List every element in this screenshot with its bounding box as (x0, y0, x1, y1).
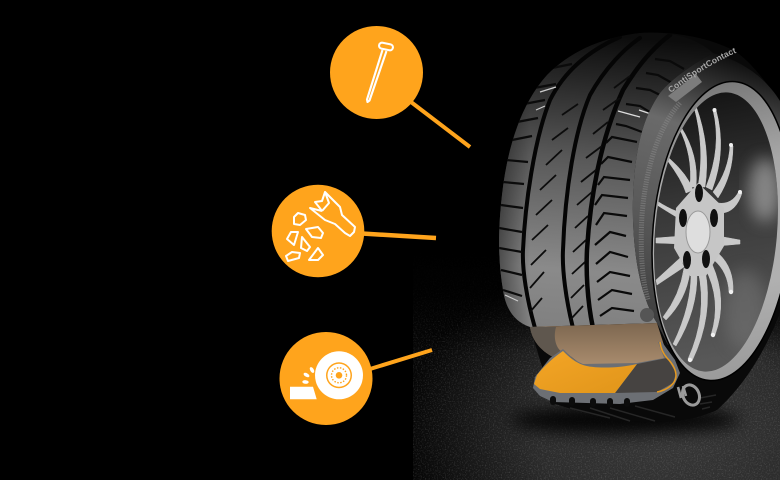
left shoulder sipes (499, 64, 572, 296)
wheel barrel (643, 87, 780, 377)
kerb (290, 387, 317, 399)
icon: broken glass (272, 185, 364, 277)
pointer line: nail (411, 102, 470, 147)
sidewall round mark (640, 308, 654, 322)
sidewall (633, 53, 780, 345)
sidewall text: ContiSportContact (668, 48, 736, 92)
orange sealant edge (657, 342, 676, 392)
tyre photo (499, 32, 780, 422)
wheel spokes (656, 106, 742, 361)
sidewall small print (641, 103, 680, 300)
tread below cross-section (570, 395, 716, 421)
wheel rim flange (640, 76, 780, 386)
icon: nail (330, 26, 423, 119)
cross-section of tyre (533, 342, 680, 407)
tread lugs (550, 396, 630, 407)
outer casing (533, 342, 680, 404)
interior left shade (530, 327, 562, 357)
spoke tips (688, 108, 742, 362)
logo on sidewall (678, 382, 703, 408)
tread surface (499, 44, 712, 327)
middle rib sipes (530, 76, 630, 320)
wheel (315, 351, 363, 399)
impact marks (302, 366, 315, 384)
icon: kerb impact (280, 332, 372, 425)
right shoulder sipes (595, 59, 684, 316)
pointer line: glass (362, 234, 436, 238)
main grooves (523, 35, 670, 328)
barrel shading (723, 158, 780, 350)
orange sealant layer (534, 351, 637, 393)
pointer line: kerb (370, 350, 432, 369)
asphalt ground (413, 250, 780, 480)
sidewall label patch (668, 74, 702, 102)
tyre body (499, 33, 780, 422)
translucent tyre interior (530, 323, 668, 369)
wheel hub (674, 183, 724, 276)
grey inner cavity (615, 358, 676, 393)
